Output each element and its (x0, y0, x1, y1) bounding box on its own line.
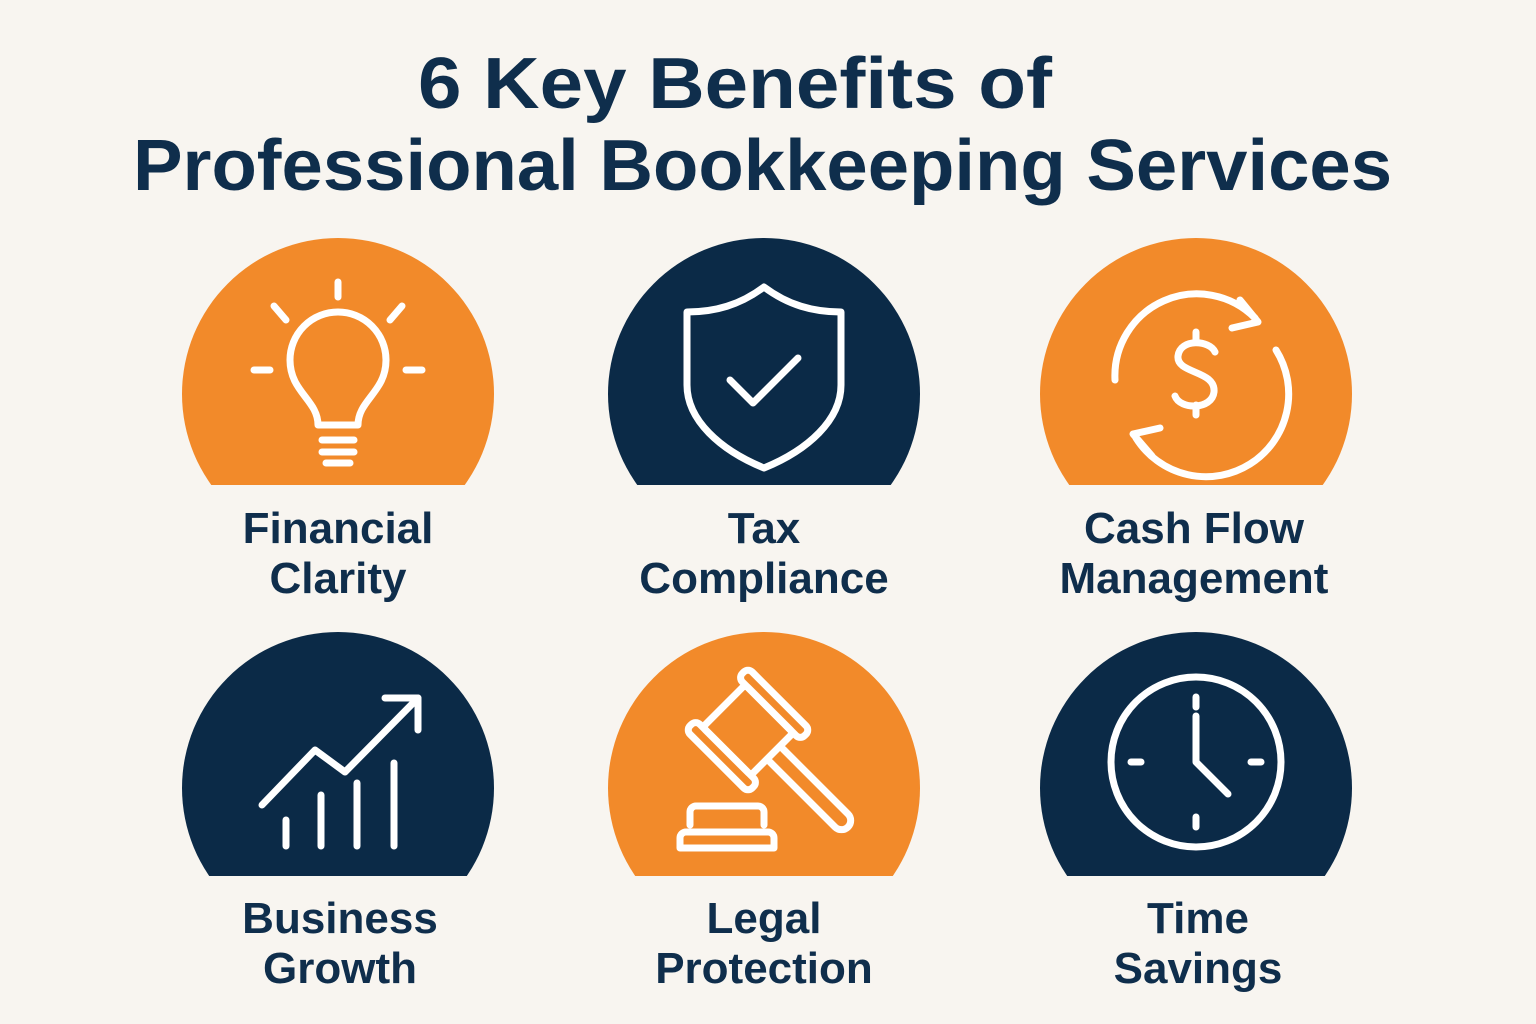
panel: financial clarity (182, 238, 494, 603)
title: 6 Key Benefits of (418, 44, 1053, 124)
icon: dollar cycle (1115, 294, 1289, 477)
label: Growth (263, 944, 417, 993)
label: Time (1147, 894, 1249, 943)
title: Professional Bookkeeping Services (133, 126, 1392, 206)
label (242, 894, 438, 993)
icon: clock (1111, 677, 1281, 847)
label (1114, 894, 1282, 993)
title (133, 44, 1392, 206)
label: Financial (243, 504, 433, 553)
panel: tax compliance (608, 238, 920, 603)
label: Business (242, 894, 438, 943)
label (243, 504, 433, 603)
panel: business growth (182, 632, 494, 993)
label: Savings (1114, 944, 1282, 993)
icon: growth chart (262, 698, 418, 846)
label: Cash Flow (1084, 504, 1305, 553)
panel: time savings (1040, 632, 1352, 993)
icon: lightbulb (254, 282, 422, 463)
label: Compliance (639, 554, 889, 603)
label: Protection (655, 944, 873, 993)
icon: shield (687, 287, 841, 468)
label: Clarity (270, 554, 407, 603)
panel: cash flow (1040, 238, 1352, 603)
label (639, 504, 889, 603)
panel: legal protection (608, 632, 920, 993)
label: Legal (707, 894, 821, 943)
label: Management (1060, 554, 1329, 603)
label (1060, 504, 1329, 603)
icon: gavel (680, 668, 851, 848)
label (655, 894, 873, 993)
label: Tax (728, 504, 801, 553)
